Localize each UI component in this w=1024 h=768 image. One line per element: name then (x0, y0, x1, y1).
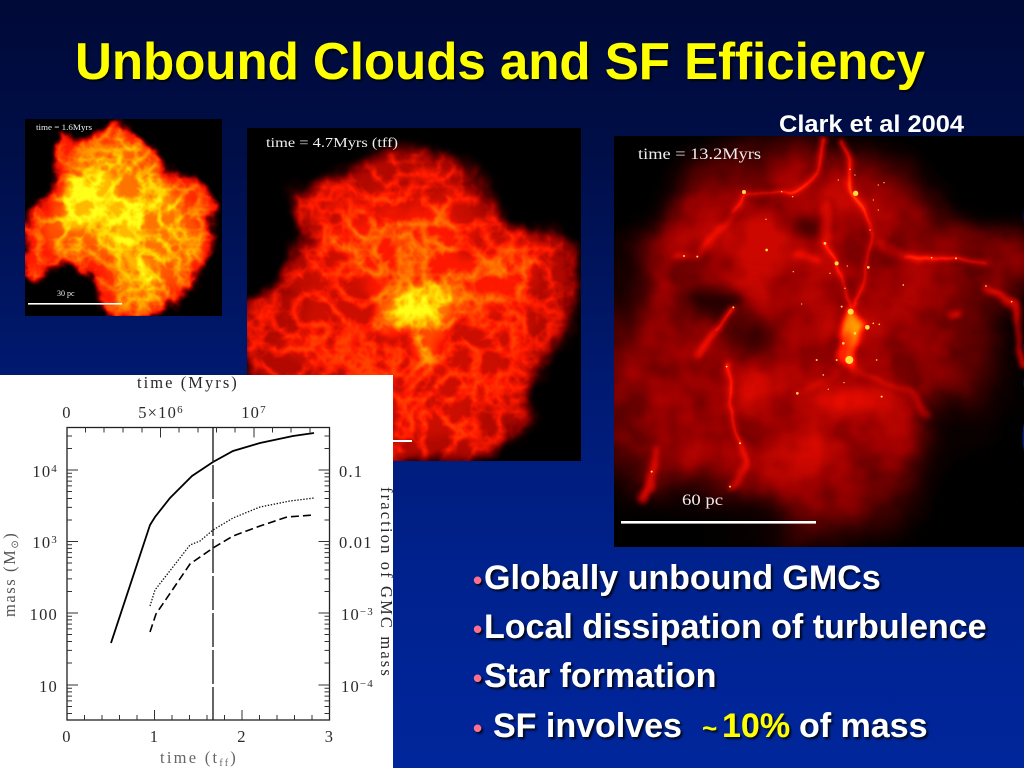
left axis title: ⊙ (10, 539, 21, 549)
bullet 4: ~ (702, 713, 717, 743)
bullet list (473, 559, 986, 745)
bottom axis title: ) (230, 748, 237, 767)
right axis labels: −4 (360, 678, 374, 690)
left axis labels (30, 462, 58, 696)
bullet 2: • (473, 614, 482, 644)
bullet 1: • (473, 565, 482, 595)
label: 30 pc: 30 pc (57, 289, 75, 298)
bullet 4: SF involves (493, 707, 682, 745)
top axis title: time (Myrs) (137, 373, 238, 392)
line: dotted series (150, 498, 314, 606)
top axis labels: 10 (241, 403, 260, 422)
panel: mass vs time chart (0, 373, 396, 768)
title: Unbound Clouds and SF Efficiency (75, 33, 925, 91)
gas filaments (643, 140, 1023, 500)
bullet 4: of mass (799, 707, 928, 745)
left axis labels: 4 (51, 463, 58, 475)
top axis labels (62, 403, 267, 422)
plot frame (67, 428, 330, 720)
left axis title: mass (M (0, 549, 19, 617)
label: time 13.2 Myrs: time = 13.2Myrs (638, 146, 761, 163)
left axis title: ) (0, 532, 19, 539)
right axis labels: −3 (360, 606, 374, 618)
panel: cloud at 1.6 Myrs (25, 119, 222, 316)
bullet 3: Star formation (484, 657, 716, 695)
label: time 1.6 Myrs: time = 1.6Myrs (36, 122, 92, 132)
right axis labels: 0.1 (339, 462, 363, 481)
top axis labels: 6 (177, 404, 184, 416)
top axis labels: 7 (260, 404, 267, 416)
top axis labels: 5×10 (138, 403, 177, 422)
left axis labels: 3 (51, 534, 58, 546)
panel: cloud at 4.7 Myrs (247, 128, 581, 461)
bottom axis labels: 1 (150, 727, 159, 746)
scale bar stub (393, 440, 412, 442)
scale bar: 60 pc (621, 521, 816, 524)
citation: Clark et al 2004 (779, 111, 965, 138)
right axis labels (339, 462, 374, 696)
left axis labels: 10 (32, 533, 51, 552)
scale bar: 30 pc (28, 303, 122, 305)
bottom axis labels: 2 (237, 727, 247, 746)
bullet 3: • (473, 663, 482, 693)
bottom axis labels: 3 (325, 727, 334, 746)
bottom axis title: time (t (160, 748, 218, 767)
bullet 1: Globally unbound GMCs (484, 559, 881, 597)
star clusters (651, 169, 1012, 488)
axis ticks (67, 428, 330, 720)
line: dashed series (150, 515, 314, 632)
panel: cloud at 13.2 Myrs (614, 136, 1024, 547)
left axis labels: 10 (39, 677, 58, 696)
right axis title: fraction of GMC mass (377, 487, 396, 677)
bullet 4: • (473, 713, 482, 743)
left axis labels: 10 (32, 462, 51, 481)
right axis labels: 10 (341, 677, 360, 696)
line: free-fall time marker (212, 428, 214, 720)
bullet 4: 10% (722, 707, 790, 745)
right axis labels: 0.01 (339, 533, 373, 552)
right axis labels: 10 (341, 605, 360, 624)
bullet 2: Local dissipation of turbulence (484, 608, 986, 646)
label: 60 pc: 60 pc (682, 492, 723, 509)
bottom axis labels: 0 (62, 727, 72, 746)
label: time 4.7 Myrs: time = 4.7Myrs (tff) (266, 136, 398, 151)
top axis labels: 0 (62, 403, 72, 422)
bottom axis labels (62, 727, 334, 746)
line: total mass (solid) (111, 433, 314, 643)
left axis labels: 100 (30, 605, 58, 624)
